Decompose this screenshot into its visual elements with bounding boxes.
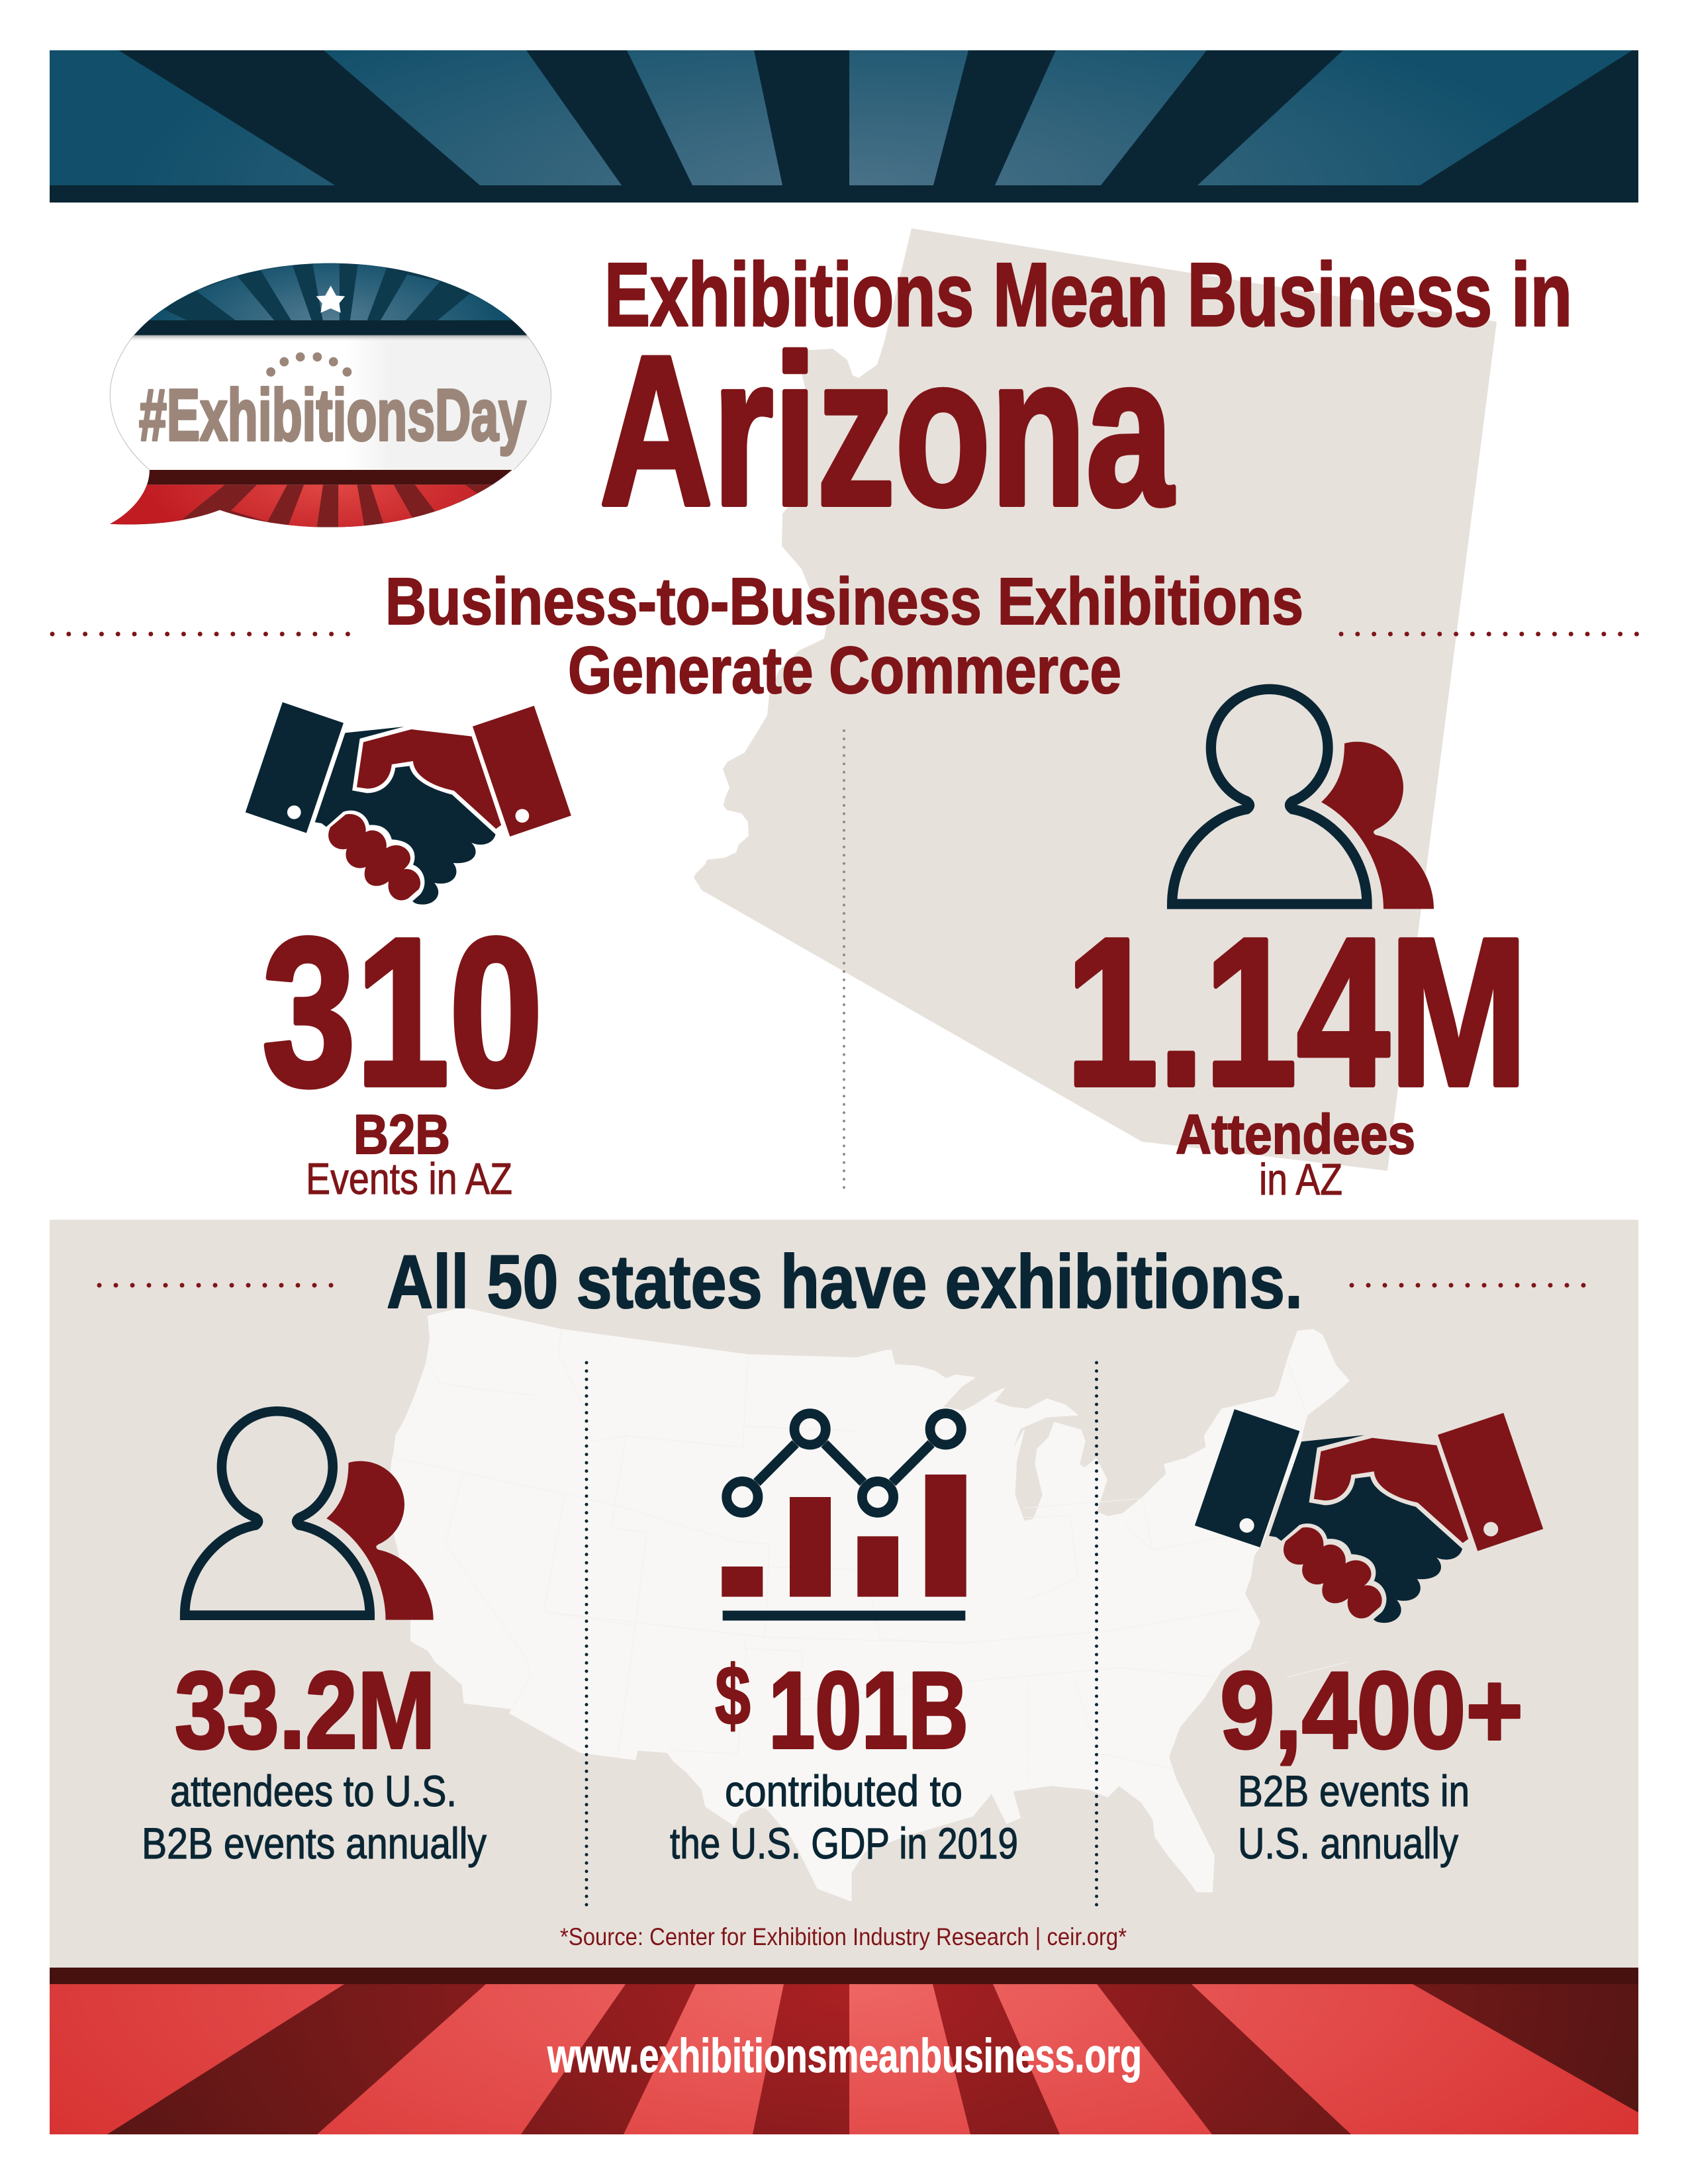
stat: 310 B2B Events in AZ: B2B [353, 1103, 450, 1165]
icon: handshake (U.S.) [1195, 1409, 1543, 1623]
logo: #ExhibitionsDay speech bubble [110, 263, 551, 527]
stat: 33.2M attendees: attendees to U.S. [170, 1766, 457, 1815]
title: Arizona: Arizona [600, 312, 1174, 550]
icon: handshake (Arizona events) [246, 702, 571, 905]
heading: Business-to-Business Exhibitions Generate Commerce: Generate Commerce [568, 633, 1121, 707]
stat: $101B GDP: contributed to [725, 1766, 962, 1815]
stat: 1.14M Attendees in AZ: Attendees [1176, 1103, 1415, 1165]
heading: All 50 states have exhibitions.: All 50 states have exhibitions. [387, 1240, 1303, 1324]
icon: attendees (Arizona) [1172, 689, 1434, 909]
logo: #ExhibitionsDay speech bubble: #ExhibitionsDay [139, 375, 526, 456]
panel: All 50 states [50, 1220, 1638, 1968]
stat: 33.2M attendees [142, 1649, 487, 1868]
stat: 33.2M attendees: 33.2M [175, 1649, 436, 1771]
stat: 1.14M Attendees in AZ: 1.14M [1066, 895, 1528, 1130]
banner: top blue sunburst [50, 50, 1638, 203]
stat: 310 B2B Events in AZ [262, 895, 543, 1204]
stat: 9,400+ events: 9,400+ [1220, 1649, 1523, 1771]
stat: $101B GDP [670, 1649, 1018, 1868]
stat: 9,400+ events: U.S. annually [1238, 1819, 1458, 1868]
stat: 9,400+ events: B2B events in [1238, 1766, 1470, 1815]
heading: Business-to-Business Exhibitions Generate Commerce [385, 565, 1303, 707]
banner: bottom red sunburst [50, 1968, 1638, 2134]
stat: 1.14M Attendees in AZ [1066, 895, 1528, 1205]
icon: attendees (U.S.) [185, 1411, 434, 1620]
stat: $101B GDP: the U.S. GDP in 2019 [670, 1819, 1018, 1868]
map: contiguous United States [389, 1308, 1349, 1901]
stat: $101B GDP: 101B [769, 1649, 968, 1771]
icon: bar and line chart [722, 1414, 966, 1621]
stat: $101B GDP: $ [715, 1649, 751, 1743]
heading: Business-to-Business Exhibitions Generate Commerce: Business-to-Business Exhibitions [385, 565, 1303, 639]
website url: www.exhibitionsmeanbusiness.org [547, 2030, 1142, 2083]
source note: *Source: Center for Exhibition Industry Research | ceir.org* [560, 1923, 1127, 1950]
stat: 310 B2B Events in AZ: Events in AZ [306, 1154, 512, 1204]
stat: 33.2M attendees: B2B events annually [142, 1819, 487, 1868]
stat: 310 B2B Events in AZ: 310 [262, 895, 543, 1130]
stat: 9,400+ events [1220, 1649, 1523, 1868]
map: Arizona silhouette [694, 228, 1497, 1171]
stat: 1.14M Attendees in AZ: in AZ [1259, 1155, 1342, 1205]
